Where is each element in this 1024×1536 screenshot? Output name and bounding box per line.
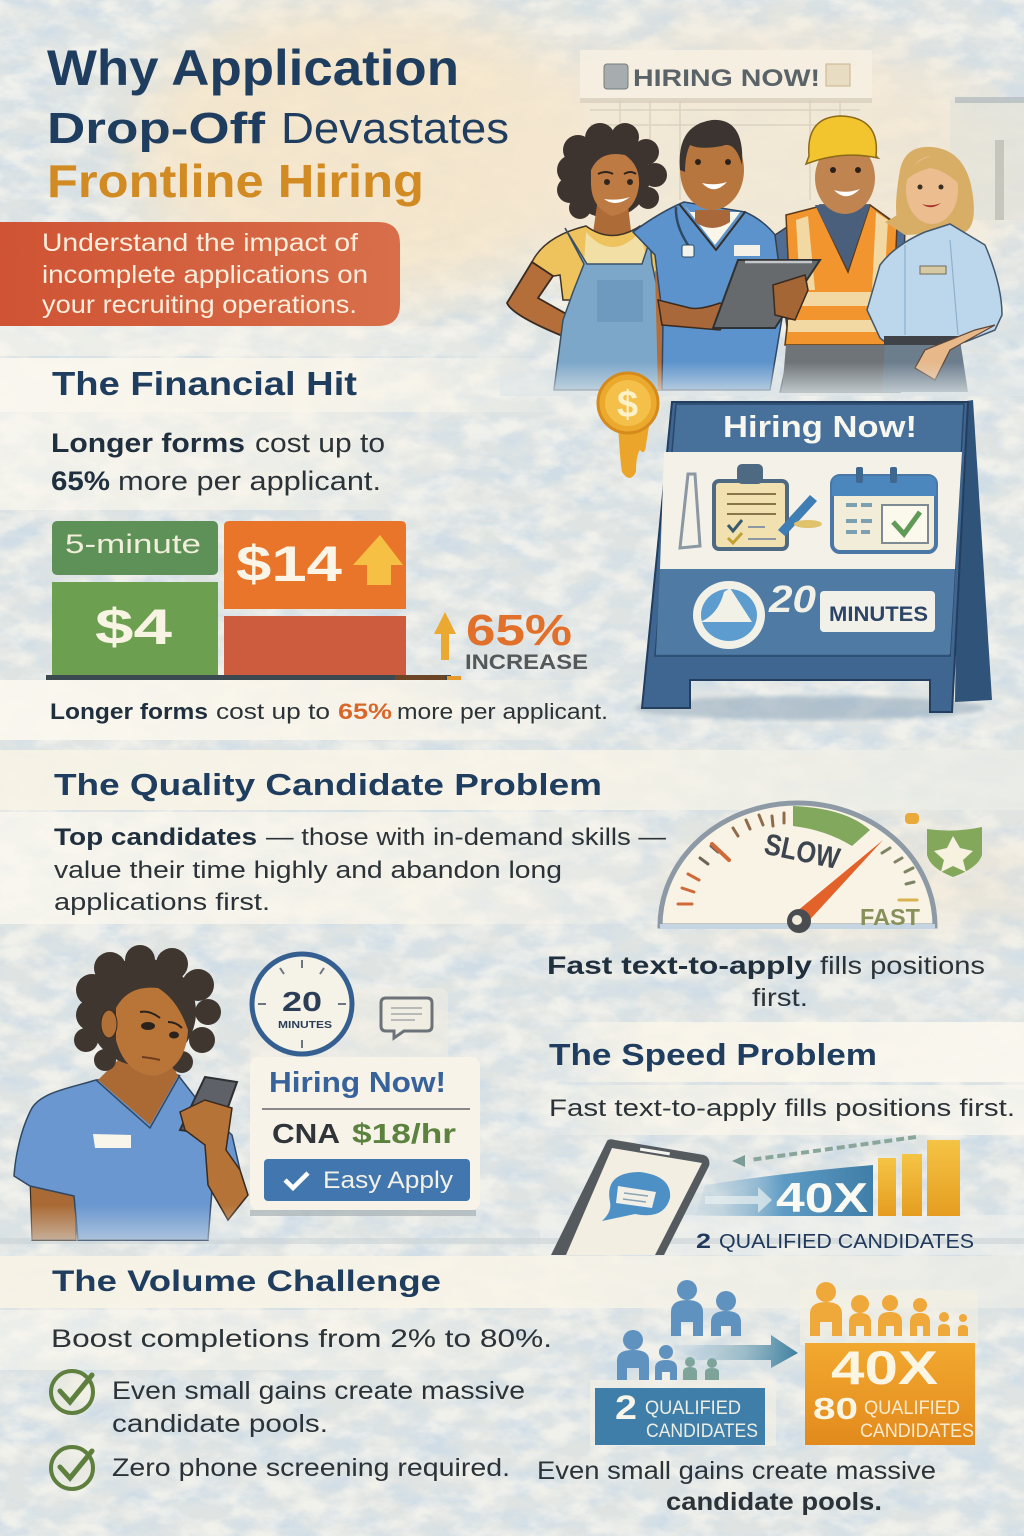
text: longer forms intro: [51, 428, 385, 496]
text: quality body: [54, 824, 666, 916]
text: fast text-to-apply: fills positions: [820, 952, 985, 980]
text: longer forms intro: Longer forms: [51, 428, 245, 458]
text: longer forms intro: more per applicant.: [118, 466, 381, 496]
gauge label: slow: SLOW: [761, 828, 843, 876]
chart baseline: [46, 675, 451, 680]
bar: 5-minute label: [52, 521, 218, 575]
text: longer forms caption: [50, 699, 608, 724]
list item: zero phone screening: [51, 1447, 510, 1489]
text: quality body: applications first.: [54, 889, 270, 916]
subtitle banner: incomplete applications on: [42, 261, 368, 289]
icon: clipboard with pen: [680, 464, 822, 549]
card job title and wage: CNA: [272, 1118, 340, 1149]
text: quality body: — those with in-demand skills —: [266, 824, 666, 851]
box: 40x and 80 qualified candidates: [805, 1341, 975, 1445]
label: 2 qualified candidates: 2: [696, 1230, 711, 1253]
box: 40x and 80 qualified candidates: 40X: [831, 1341, 938, 1394]
subtitle banner: [0, 222, 400, 326]
job card backing panel: [250, 988, 448, 1068]
illustration: nurse checking phone: [14, 945, 248, 1240]
worker: woman in overalls: [507, 123, 672, 390]
gauge needle: [787, 840, 883, 933]
heading: the volume challenge: The Volume Challenge: [52, 1265, 441, 1298]
text: fast text-to-apply: Fast text-to-apply: [547, 952, 812, 980]
icon: quality shield with star: [905, 813, 982, 877]
bar: lower red segment: [224, 616, 406, 676]
storefront with hiring sign: [580, 50, 1024, 270]
bar: $14 cost: $14: [236, 536, 342, 592]
card job title and wage: [272, 1118, 456, 1149]
label: 2 qualified candidates: QUALIFIED CANDIDATES: [719, 1231, 974, 1253]
icon: chat bubble: [381, 998, 432, 1038]
box: 40x and 80 qualified candidates: CANDIDATES: [860, 1421, 974, 1442]
icon: calendar with check: [832, 467, 936, 552]
chart: 40x growth bars: [695, 1137, 960, 1221]
illustration: hiring now a-frame sign: [635, 400, 992, 720]
gauge green zone: [793, 806, 870, 846]
list item: zero phone screening: Zero phone screening required.: [112, 1454, 510, 1482]
list item: massive candidate pools: candidate pools.: [112, 1410, 328, 1438]
chart: 40x growth bars: 40X: [776, 1174, 868, 1221]
box: 2 qualified candidates: QUALIFIED: [645, 1398, 741, 1419]
text: boost completions: Boost completions from 2% to 80%.: [51, 1325, 552, 1353]
bar chart: form length cost: [46, 521, 451, 680]
subtitle banner: your recruiting operations.: [42, 291, 357, 319]
text: quality body: value their time highly and abandon long: [54, 857, 562, 884]
icon: 20 minutes clock: [252, 954, 352, 1054]
job card: [250, 1057, 480, 1216]
text: longer forms caption: more per applicant.: [397, 699, 608, 724]
phone in hand: [180, 1077, 248, 1220]
bar: $4 cost: [52, 582, 218, 676]
bar: 5-minute label: 5-minute: [65, 529, 201, 559]
text: longer forms caption: cost up to: [216, 699, 330, 724]
box: 2 qualified candidates: 2: [615, 1389, 637, 1427]
gauge label: fast: FAST: [860, 904, 920, 930]
text: quality body: Top candidates: [54, 824, 257, 851]
heading: the financial hit: The Financial Hit: [52, 365, 357, 402]
blue people group: [590, 1280, 776, 1446]
callout: 65% increase: [434, 606, 588, 674]
title: Frontline Hiring: [47, 155, 424, 207]
list item: massive candidate pools: [51, 1371, 525, 1438]
box: 2 qualified candidates: CANDIDATES: [646, 1421, 758, 1442]
chart: candidate pool comparison: [590, 1280, 978, 1446]
callout: 65% increase: INCREASE: [465, 651, 588, 674]
title: Why Application: [47, 40, 459, 96]
sign heading: Hiring Now!: [723, 409, 917, 444]
bar: $14 cost: [224, 521, 406, 609]
icon: 20 minutes clock: MINUTES: [278, 1020, 332, 1031]
clipboard: [713, 260, 820, 328]
heading: the quality candidate problem: The Quality Candidate Problem: [54, 767, 602, 802]
box: 2 qualified candidates: [595, 1388, 765, 1445]
text: fast text-to-apply: [547, 952, 985, 1012]
chart: speed gauge: [660, 803, 935, 933]
card apply button: [264, 1159, 470, 1201]
box: 40x and 80 qualified candidates: 80: [813, 1391, 858, 1426]
card apply button: Easy Apply: [323, 1167, 453, 1194]
arrow to 40x: [675, 1335, 798, 1368]
worker: woman in light blue shirt: [867, 147, 1002, 392]
sign: 20 minutes: 20: [768, 579, 816, 621]
orange people group: [800, 1282, 978, 1345]
icon: 20 minutes clock: 20: [282, 986, 322, 1017]
callout: 65% increase: 65%: [466, 606, 572, 655]
box: 40x and 80 qualified candidates: QUALIFIED: [864, 1398, 960, 1419]
bars: [878, 1140, 960, 1216]
text: speed body: Fast text-to-apply fills positions first.: [549, 1095, 1015, 1122]
storefront with hiring sign: HIRING NOW!: [633, 65, 820, 92]
icon: smartphone with message: [551, 1139, 709, 1255]
text: longer forms intro: 65%: [51, 466, 110, 496]
text: fast text-to-apply: first.: [752, 984, 808, 1012]
text: massive candidate pools caption: [537, 1457, 936, 1516]
worker: nurse in blue scrubs: [633, 120, 790, 390]
icon: melting dollar coin: [598, 373, 658, 478]
bar: $4 cost: $4: [95, 599, 172, 655]
icon: melting dollar coin: $: [617, 384, 638, 426]
subtitle banner: Understand the impact of: [42, 229, 358, 257]
text: longer forms caption: Longer forms: [50, 699, 208, 724]
worker: construction worker with hard hat and vest: [775, 116, 905, 392]
text: massive candidate pools caption: Even small gains create massive: [537, 1457, 936, 1485]
text: longer forms intro: cost up to: [255, 428, 385, 458]
card heading: Hiring Now!: [269, 1067, 446, 1099]
illustration: four frontline workers: [500, 116, 1024, 396]
sign: 20 minutes: [768, 579, 935, 632]
title: Devastates: [281, 104, 509, 153]
icon: round logo: [693, 581, 765, 649]
title: Drop-Off: [47, 104, 265, 153]
text: longer forms caption: 65%: [338, 699, 392, 724]
text: massive candidate pools caption: candidate pools.: [666, 1488, 882, 1516]
list item: massive candidate pools: Even small gains create massive: [112, 1377, 525, 1405]
title: [47, 40, 509, 207]
card job title and wage: $18/hr: [352, 1118, 456, 1149]
heading: the speed problem: The Speed Problem: [549, 1037, 877, 1072]
dashed arrow: [732, 1137, 916, 1167]
sign: 20 minutes: MINUTES: [829, 603, 928, 626]
